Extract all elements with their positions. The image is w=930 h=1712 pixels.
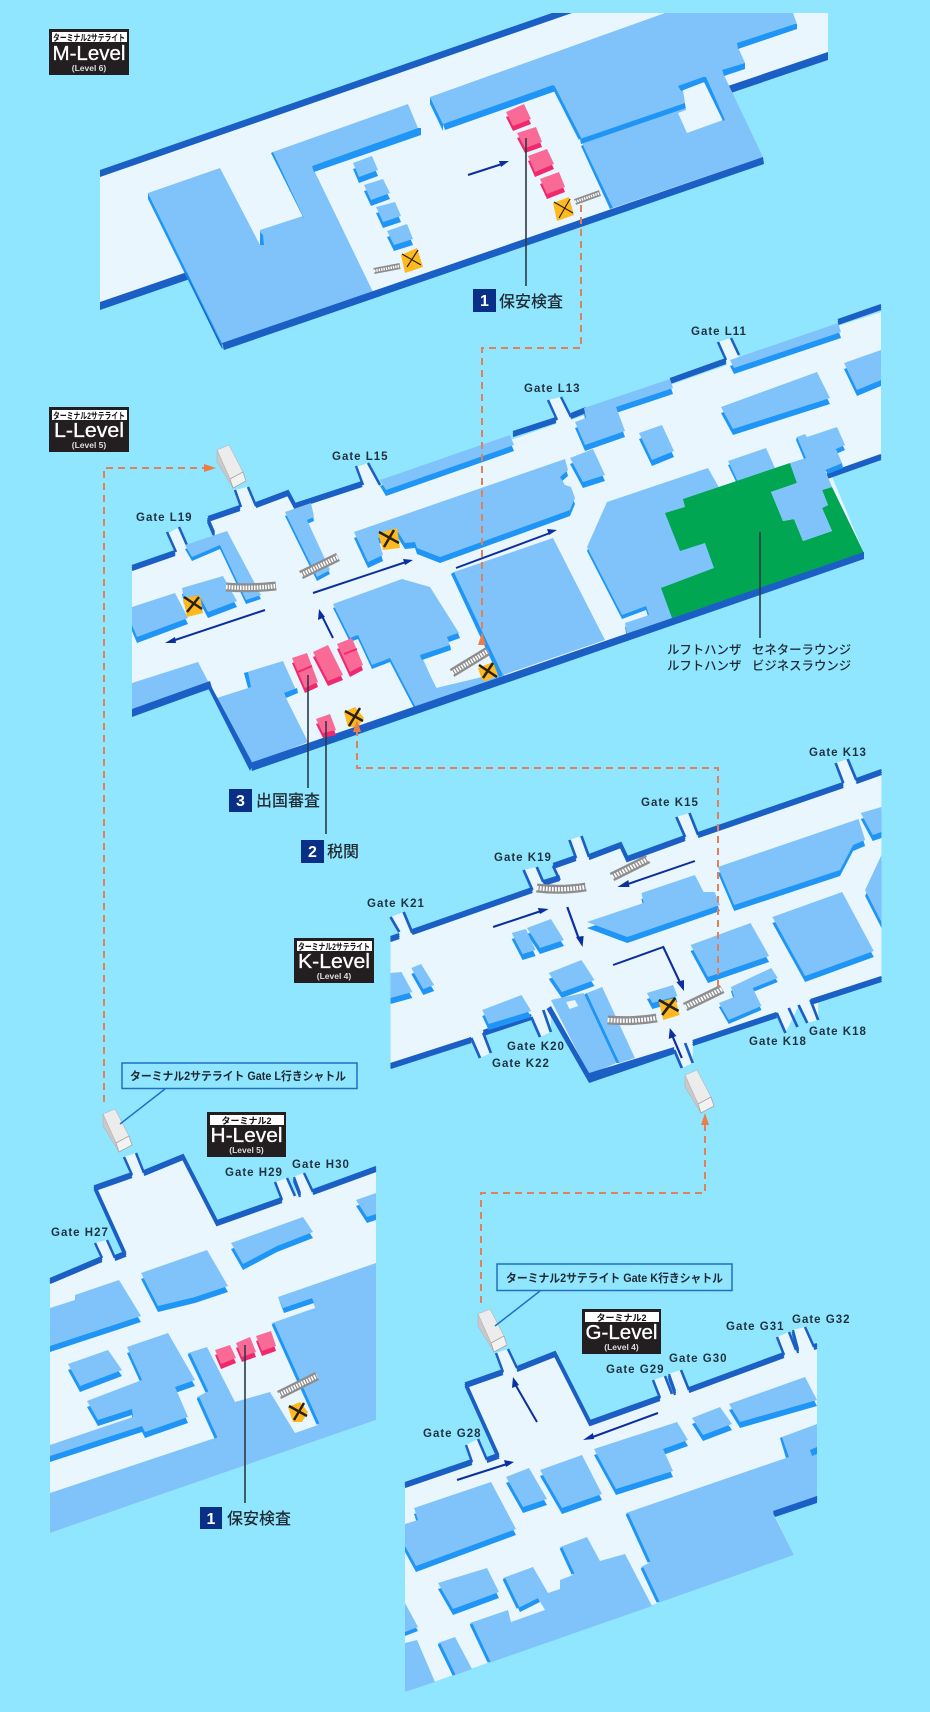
gate labels L-Level	[136, 326, 747, 524]
panel: L-Level floor map	[132, 305, 881, 771]
icon: elevator right	[553, 197, 574, 221]
building block left	[148, 193, 222, 349]
icon: escalator left	[374, 266, 400, 271]
gate labels K-Level: Gate K18	[749, 1036, 807, 1048]
gate labels K-Level: Gate K19	[494, 852, 552, 864]
gate labels L-Level: Gate L11	[691, 326, 747, 338]
gate labels L-Level: Gate L15	[332, 451, 389, 463]
panel: M-Level floor map	[100, 13, 828, 350]
gate labels K-Level: Gate K22	[492, 1058, 550, 1070]
panel: G-Level floor map	[405, 1309, 817, 1692]
level label: K-Level	[294, 938, 374, 983]
gate labels K-Level	[367, 747, 867, 1070]
label: 3 immigration	[229, 789, 320, 812]
icon: escalator H	[279, 1376, 317, 1395]
label: 2 customs: 2	[308, 844, 317, 861]
building block right	[430, 13, 797, 208]
level label: G-Level: G-Level	[586, 1322, 658, 1344]
level label: L-Level: L-Level	[54, 420, 124, 442]
label: 1 security: 保安検査	[499, 293, 563, 311]
icons: escalators L-Level	[226, 557, 488, 673]
level label: K-Level: (Level 4)	[317, 971, 351, 981]
callout: shuttle to Gate K: ターミナル2サテライト Gate K行きシャトル	[506, 1271, 723, 1285]
label: 1 security	[473, 289, 563, 312]
level label: H-Level: H-Level	[210, 1125, 282, 1147]
security checkpoint pink blocks	[506, 104, 565, 194]
icon: shuttle bus H	[103, 1109, 132, 1152]
callout: shuttle to Gate L	[120, 1063, 357, 1124]
label: Lufthansa lounges	[667, 643, 851, 673]
label: Lufthansa lounges: ビジネスラウンジ	[752, 659, 851, 673]
level label: L-Level: (Level 5)	[72, 440, 106, 450]
blocks: K-Level shops	[391, 807, 881, 1075]
arrows G-Level	[457, 1377, 658, 1480]
gate labels K-Level: Gate K20	[507, 1041, 565, 1053]
leader lines L-Level	[308, 532, 760, 834]
icon: shuttle bus K	[685, 1070, 714, 1113]
immigration pink blocks	[292, 638, 363, 688]
level label: G-Level: (Level 4)	[604, 1342, 639, 1352]
level label: M-Level: M-Level	[52, 43, 126, 65]
icon: shuttle bus G	[478, 1309, 507, 1352]
level label: G-Level	[582, 1309, 661, 1354]
gate labels K-Level: Gate K21	[367, 898, 425, 910]
gate labels H-Level: Gate H29	[225, 1167, 283, 1179]
icon: elevator left	[401, 248, 423, 273]
blocks: L-Level shops	[132, 323, 881, 764]
level label: M-Level: (Level 6)	[72, 63, 106, 73]
blocks: G-Level shops	[405, 1377, 817, 1692]
route: M to L dashed arrow	[478, 205, 581, 645]
label: Lufthansa lounges: セネターラウンジ	[752, 643, 851, 657]
gate labels G-Level: Gate G29	[606, 1364, 664, 1376]
label: 2 customs: 税関	[327, 843, 359, 861]
level label: M-Level: ターミナル2サテライト	[53, 32, 125, 43]
arrow	[468, 161, 509, 175]
block: lounge core	[771, 427, 845, 541]
icon: shuttle bus L	[217, 445, 246, 488]
gate labels H-Level: Gate H27	[51, 1227, 109, 1239]
gate labels K-Level: Gate K15	[641, 797, 699, 809]
label: 1 security H	[200, 1507, 291, 1529]
icon: elevator K	[659, 998, 680, 1020]
route: H to L shuttle dashed arrow	[104, 464, 216, 1102]
level label: G-Level: ターミナル2	[596, 1312, 646, 1323]
icon: escalator right	[575, 193, 600, 202]
label: Lufthansa lounges: ルフトハンザ	[667, 659, 741, 673]
level label: H-Level	[207, 1112, 286, 1157]
arrows L-Level	[165, 529, 557, 643]
blocks: H-Level shops	[50, 1193, 376, 1533]
leader line: security H	[244, 1345, 246, 1503]
callout: shuttle to Gate L: ターミナル2サテライト Gate L行きシャトル	[130, 1069, 346, 1083]
level label: H-Level: ターミナル2	[222, 1115, 272, 1126]
label: 1 security H: 保安検査	[227, 1510, 291, 1528]
gate labels G-Level: Gate G30	[669, 1353, 728, 1365]
level label: M-Level	[49, 29, 129, 75]
label: 1 security H: 1	[207, 1511, 216, 1528]
gate labels G-Level	[423, 1314, 850, 1440]
route: G to K shuttle dashed arrow	[481, 1113, 709, 1303]
icons: escalators K-Level	[537, 859, 722, 1021]
icons: elevators L-Level	[183, 528, 498, 727]
gate labels G-Level: Gate G32	[792, 1314, 850, 1326]
gate labels G-Level: Gate G31	[726, 1321, 784, 1333]
gate labels H-Level: Gate H30	[292, 1159, 350, 1171]
gate labels K-Level: Gate K13	[809, 747, 867, 759]
label: 1 security: 1	[480, 293, 489, 310]
arrows K-Level	[493, 861, 695, 1058]
gate labels H-Level	[51, 1159, 350, 1239]
label: Lufthansa lounges: ルフトハンザ	[667, 643, 741, 657]
leader line: security M	[525, 138, 527, 286]
level label: L-Level: ターミナル2サテライト	[53, 410, 125, 421]
level label: K-Level: ターミナル2サテライト	[298, 941, 370, 952]
panel: K-Level floor map	[391, 759, 881, 1113]
gate labels G-Level: Gate G28	[423, 1428, 482, 1440]
route: L to K dashed arrow	[353, 720, 718, 987]
label: 3 immigration: 出国審査	[256, 792, 320, 810]
checkpoint blocks blue	[353, 156, 413, 245]
customs pink block	[316, 714, 336, 733]
security checkpoint pink blocks	[215, 1331, 276, 1364]
level label: H-Level: (Level 5)	[229, 1145, 264, 1155]
gate labels L-Level: Gate L13	[524, 383, 581, 395]
callout: shuttle to Gate K	[495, 1264, 732, 1326]
level label: K-Level: K-Level	[298, 951, 370, 973]
gate labels L-Level: Gate L19	[136, 512, 193, 524]
level label: L-Level	[49, 407, 129, 452]
label: 3 immigration: 3	[236, 793, 245, 810]
gate labels K-Level: Gate K18	[809, 1026, 867, 1038]
lounge: Lufthansa green area	[661, 463, 864, 618]
panel: H-Level floor map	[50, 1109, 376, 1533]
label: 2 customs	[301, 840, 359, 863]
icon: elevator H	[288, 1402, 308, 1422]
